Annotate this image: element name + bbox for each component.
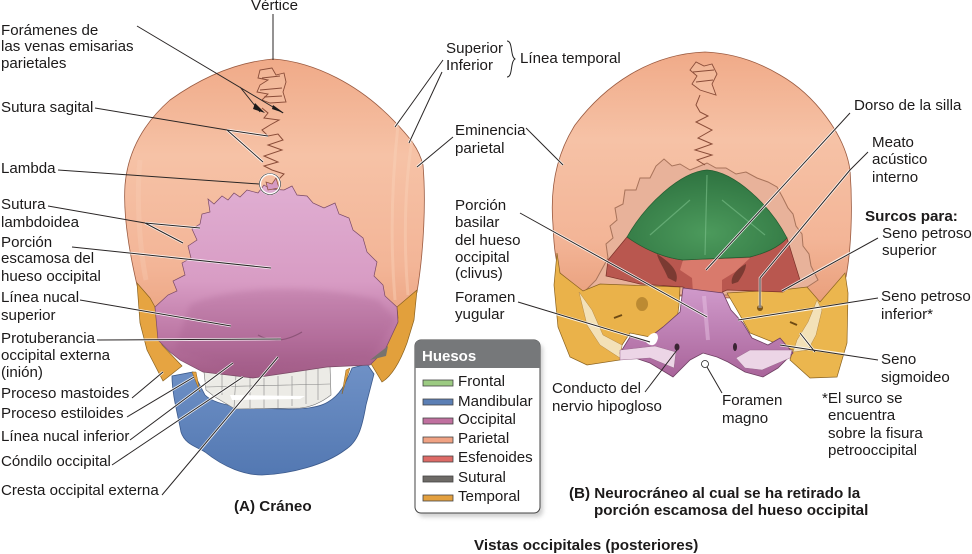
- labels: panel A left column: Cóndilo occipital: [1, 453, 111, 470]
- foramen yugular opening: [645, 333, 658, 345]
- labels: panel B right and bottom: Seno: [881, 351, 916, 368]
- labels: panel A left column: Forámenes de: [1, 22, 98, 39]
- leader lines: [48, 14, 878, 495]
- labels: panel B right and bottom: Foramen: [722, 392, 782, 409]
- labels: panel A left column: lambdoidea: [1, 214, 80, 231]
- temporal holes: [636, 297, 648, 311]
- labels: panel A left column: superior: [1, 307, 56, 324]
- teeth: [204, 366, 331, 409]
- labels: centre column: Foramen: [455, 289, 515, 306]
- legend: Huesos: Parietal: [458, 430, 509, 447]
- skull A: cranium posterior view: [125, 59, 424, 475]
- labels: panel B right and bottom: petrooccipital: [828, 442, 917, 459]
- lambda circle: [260, 174, 280, 194]
- labels: panel A left column: las venas emisarias: [1, 38, 134, 55]
- labels: panel B right and bottom: *El surco se: [822, 390, 903, 407]
- frontal bone: [627, 170, 787, 260]
- legend: Huesos: Huesos: [422, 348, 476, 365]
- parietal bone: [125, 59, 424, 335]
- labels: panel A left column: Protuberancia: [1, 330, 96, 347]
- labels: panel A left column: hueso occipital: [1, 268, 101, 285]
- caption A: (A) Cráneo: [234, 498, 312, 515]
- labels: panel B right and bottom: Dorso de la silla: [854, 97, 962, 114]
- sphenoid centre: [680, 258, 750, 293]
- mandible: [172, 364, 374, 475]
- labels: panel B right and bottom: magno: [722, 410, 768, 427]
- sagittal suture: [257, 68, 286, 190]
- labels: panel B right and bottom: Seno petroso: [881, 288, 971, 305]
- labels: panel B right and bottom: [552, 97, 972, 459]
- styloid processes: [192, 368, 350, 394]
- temporal bone right: [370, 290, 417, 382]
- temporal line labels with bracket: Inferior: [446, 57, 493, 74]
- occipital bone: [155, 185, 398, 378]
- labels: panel A left column: Sutura sagital: [1, 99, 93, 116]
- labels: panel B right and bottom: inferior*: [881, 306, 933, 323]
- legend: Huesos: Occipital: [458, 411, 516, 428]
- hypoglossal canal: [674, 344, 680, 350]
- sutural patch: [370, 346, 388, 360]
- labels: panel B right and bottom: superior: [882, 242, 937, 259]
- legend: Huesos: [415, 340, 543, 517]
- dark sphenoid fossae: [657, 254, 746, 284]
- labels: panel A left column: Línea nucal inferior: [1, 428, 129, 445]
- labels: panel B right and bottom: sigmoideo: [881, 369, 950, 386]
- caption B: porción escamosa del hueso occipital: [594, 502, 868, 519]
- main caption: Vistas occipitales (posteriores): [474, 537, 698, 554]
- labels: centre column: Porción: [455, 197, 506, 214]
- labels: panel B right and bottom: encuentra: [828, 407, 896, 424]
- labels: panel B right and bottom: nervio hipogloso: [552, 398, 662, 415]
- occipital highlight: [704, 296, 708, 340]
- legend: Huesos: Sutural: [458, 469, 506, 486]
- sutural pale bands: [579, 292, 822, 358]
- external occipital protuberance: [258, 332, 302, 340]
- labels: panel A left column: Línea nucal: [1, 289, 79, 306]
- labels: panel A left column: [1, 0, 298, 499]
- labels: panel A left column: occipital externa: [1, 347, 111, 364]
- labels: centre column: Eminencia: [455, 122, 526, 139]
- labels: panel A left column: Sutura: [1, 196, 46, 213]
- temporal bone left interior: [554, 253, 680, 365]
- occipital shading: [175, 289, 396, 372]
- labels: panel A left column: (inión): [1, 364, 43, 381]
- labels: panel A left column: Proceso estiloides: [1, 405, 124, 422]
- legend: Huesos: Temporal: [458, 488, 520, 505]
- sphenoid bone: [606, 237, 800, 293]
- legend: Huesos: Frontal: [458, 373, 505, 390]
- labels: panel A left column: escamosa del: [1, 250, 94, 267]
- labels: panel A left column: Porción: [1, 234, 52, 251]
- temporal line labels with bracket: Línea temporal: [520, 50, 621, 67]
- sagittal suture B: [690, 62, 717, 165]
- labels: centre column: [455, 122, 526, 323]
- labels: centre column: yugular: [455, 306, 505, 323]
- labels: centre column: parietal: [455, 140, 505, 157]
- labels: panel B right and bottom: Seno petroso: [882, 225, 972, 242]
- foramen magnum marker: [702, 360, 708, 368]
- caption B: [569, 485, 868, 519]
- labels: centre column: del hueso: [455, 232, 520, 249]
- temporal line labels with bracket: Superior: [446, 40, 503, 57]
- skull B: neurocranium posterior view: [552, 52, 851, 378]
- labels: panel B right and bottom: Conducto del: [552, 380, 641, 397]
- labels: centre column: (clivus): [455, 265, 503, 282]
- legend: Huesos: Esfenoides: [458, 449, 533, 466]
- temporal line labels with bracket: [446, 40, 621, 77]
- labels: panel A left column: Proceso mastoides: [1, 385, 129, 402]
- labels: panel B right and bottom: interno: [872, 169, 918, 186]
- parietal shell: [552, 52, 851, 302]
- serrated inner edge: [584, 159, 818, 295]
- temporal lines shading: [392, 125, 412, 300]
- labels: centre column: occipital: [455, 249, 510, 266]
- legend: Huesos: Mandibular: [458, 393, 533, 410]
- labels: panel B right and bottom: acústico: [872, 151, 927, 168]
- occipital clivus: [620, 288, 793, 377]
- labels: panel A left column: parietales: [1, 55, 66, 72]
- labels: centre column: basilar: [455, 214, 499, 231]
- labels: panel A left column: Lambda: [1, 160, 56, 177]
- labels: panel A left column: Cresta occipital externa: [1, 482, 159, 499]
- labels: panel B right and bottom: Meato: [872, 134, 914, 151]
- temporal bone left: [137, 283, 182, 381]
- internal acoustic meatus: [757, 305, 763, 311]
- caption B: (B) Neurocráneo al cual se ha retirado la: [569, 485, 861, 502]
- pale cut bone: [620, 346, 792, 370]
- labels: panel B right and bottom: sobre la fisura: [828, 425, 923, 442]
- temporal bone right interior: [727, 273, 848, 378]
- labels: panel B right and bottom: Surcos para:: [865, 208, 958, 225]
